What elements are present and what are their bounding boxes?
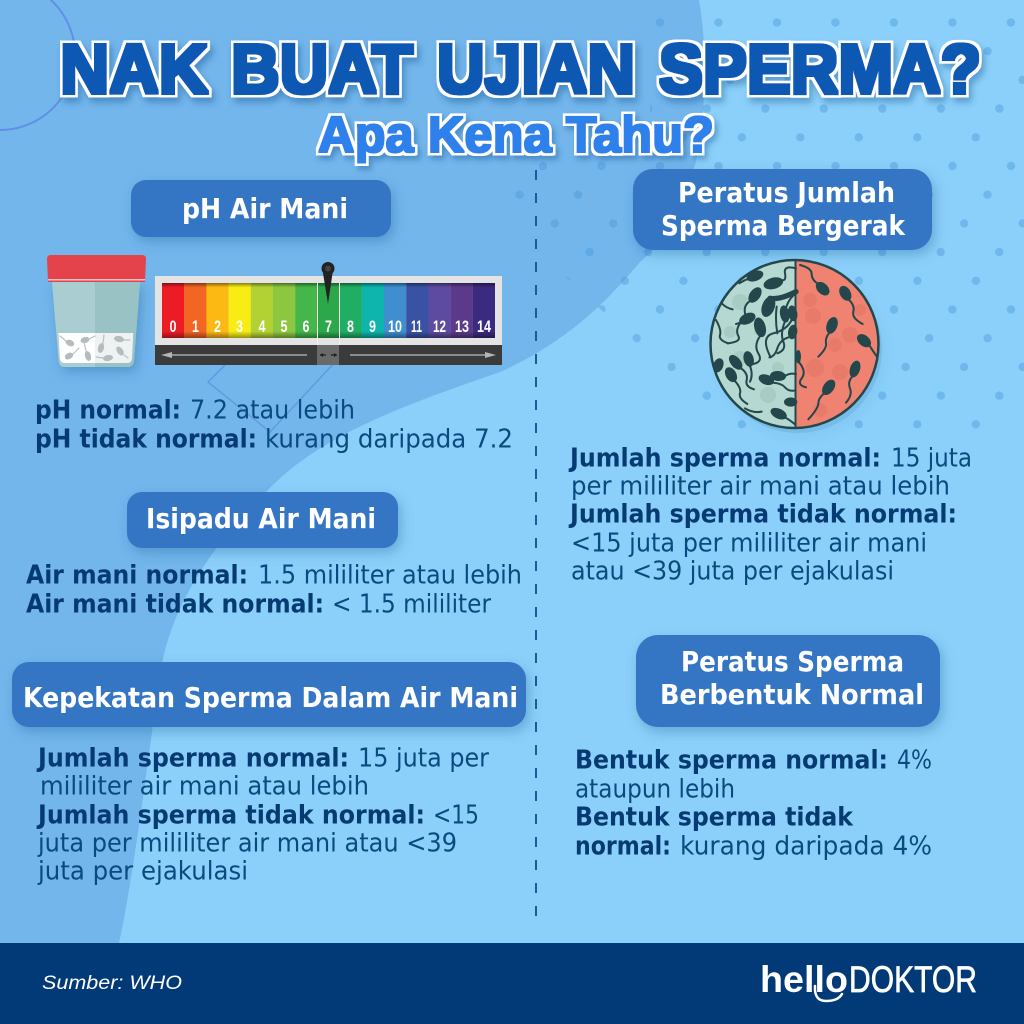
panel: isipadu air mani bbox=[26, 492, 522, 620]
text: volume values bbox=[26, 560, 522, 620]
panel: peratus jumlah sperma bergerak bbox=[568, 169, 972, 586]
panel: kepekatan sperma bbox=[12, 662, 526, 886]
text: morphology values: ataupun lebih bbox=[575, 774, 735, 804]
title: BUAT bbox=[231, 30, 413, 108]
chart: pH scale 0 to 14: 8 bbox=[347, 317, 354, 336]
panel: pH air mani bbox=[35, 180, 513, 454]
text: concentration values: juta per mililiter air mani atau <39 bbox=[37, 828, 457, 858]
heading: Peratus Sperma Berbentuk Normal: Berbentuk Normal bbox=[660, 678, 924, 711]
chart: pH scale 0 to 14: 0 bbox=[170, 317, 176, 336]
text: motility values: per mililiter air mani atau lebih bbox=[571, 472, 950, 502]
text: motility values bbox=[568, 444, 972, 586]
footer bar bbox=[0, 943, 1024, 1024]
text: pH values: 7.2 atau lebih bbox=[190, 396, 355, 426]
chart: pH scale 0 to 14: 14 bbox=[477, 317, 491, 336]
text: morphology values: Bentuk sperma tidak bbox=[575, 802, 854, 832]
chart: pH scale 0 to 14: 6 bbox=[302, 317, 310, 336]
text: concentration values: Jumlah sperma normal: bbox=[36, 744, 349, 774]
heading: Kepekatan Sperma Dalam Air Mani: Kepekatan Sperma Dalam Air Mani bbox=[23, 681, 518, 714]
heading: Peratus Jumlah Sperma Bergerak: Peratus Jumlah bbox=[678, 176, 895, 209]
chart: pH scale 0 to 14: 7 bbox=[325, 317, 332, 336]
chart: pH scale 0 to 14: 5 bbox=[280, 317, 288, 336]
text: concentration values: juta per ejakulasi bbox=[37, 856, 248, 886]
title: NAK bbox=[60, 30, 208, 108]
text: motility values: Jumlah sperma tidak normal: bbox=[568, 500, 957, 530]
chart: pH scale 0 to 14: 13 bbox=[455, 317, 469, 336]
decorative circle outline bbox=[0, 0, 75, 130]
chart: pH scale 0 to 14: 10 bbox=[388, 317, 402, 336]
text: motility values: atau <39 juta per ejakulasi bbox=[571, 556, 894, 586]
dot pattern bbox=[500, 10, 1024, 445]
text: pH values bbox=[35, 396, 513, 454]
heading: Isipadu Air Mani bbox=[127, 492, 398, 548]
text: volume values: Air mani normal: bbox=[26, 560, 248, 590]
chart: pH scale 0 to 14: 3 bbox=[236, 317, 243, 336]
text: morphology values bbox=[575, 746, 932, 862]
chart: pH scale 0 to 14: 11 bbox=[411, 317, 422, 336]
centre dashed divider bbox=[535, 170, 537, 922]
text: concentration values: Jumlah sperma tidak normal: bbox=[36, 800, 425, 830]
decorative diamond outline bbox=[208, 350, 335, 432]
chart: pH scale 0 to 14: 1 bbox=[192, 317, 199, 336]
text: concentration values: mililiter air mani atau lebih bbox=[40, 772, 369, 802]
text: concentration values: 15 juta per bbox=[358, 744, 489, 774]
heading: pH Air Mani: pH Air Mani bbox=[182, 192, 348, 225]
left half sperm bbox=[746, 270, 764, 282]
heading: Peratus Jumlah Sperma Bergerak: Sperma Bergerak bbox=[661, 209, 906, 242]
text: pH values: pH tidak normal: bbox=[35, 424, 257, 454]
text: motility values: 15 juta bbox=[891, 444, 972, 474]
text: volume values: 1.5 mililiter atau lebih bbox=[258, 560, 522, 590]
text: morphology values: normal: bbox=[575, 832, 671, 862]
text: volume values: Air mani tidak normal: bbox=[26, 590, 324, 620]
text: volume values: < 1.5 mililiter bbox=[332, 590, 491, 620]
panel: peratus sperma berbentuk normal bbox=[575, 635, 940, 862]
heading: Kepekatan Sperma Dalam Air Mani bbox=[12, 662, 526, 727]
text: pH values: pH normal: bbox=[35, 396, 181, 426]
title: UJIAN bbox=[437, 30, 635, 108]
text: concentration values: <15 bbox=[433, 800, 479, 830]
title bbox=[60, 30, 981, 108]
icon: sperma under microscope bbox=[710, 260, 882, 433]
text: morphology values: Bentuk sperma normal: bbox=[575, 746, 888, 776]
logo: hello doktor bbox=[760, 959, 977, 1001]
subtitle: Apa Kena Tahu? bbox=[318, 106, 714, 163]
logo: hello doktor: hello bbox=[760, 959, 848, 1000]
background darker blue shape bbox=[0, 0, 705, 943]
text: motility values: Jumlah sperma normal: bbox=[568, 444, 881, 474]
chart: pH scale 0 to 14: 2 bbox=[214, 317, 221, 336]
title: SPERMA? bbox=[659, 30, 981, 108]
text: morphology values: kurang daripada 4% bbox=[680, 832, 932, 862]
text: morphology values: 4% bbox=[897, 746, 932, 776]
heading: Peratus Sperma Berbentuk Normal bbox=[636, 635, 940, 727]
text: motility values: <15 juta per mililiter air mani bbox=[571, 528, 927, 558]
heading: pH Air Mani bbox=[131, 180, 391, 237]
heading: Isipadu Air Mani: Isipadu Air Mani bbox=[146, 502, 376, 535]
chart: pH scale 0 to 14 bbox=[155, 262, 502, 365]
source note: Sumber: WHO bbox=[42, 973, 182, 994]
text: concentration values bbox=[36, 744, 489, 886]
text: pH values: kurang daripada 7.2 bbox=[265, 424, 513, 454]
chart: pH scale 0 to 14: 12 bbox=[433, 317, 446, 336]
chart: pH scale 0 to 14: 9 bbox=[369, 317, 376, 336]
icon: sample jar bbox=[47, 255, 146, 367]
heading: Peratus Jumlah Sperma Bergerak bbox=[633, 169, 932, 250]
logo: hello doktor: DOKTOR bbox=[849, 959, 977, 1000]
right half sperm bbox=[816, 282, 830, 296]
heading: Peratus Sperma Berbentuk Normal: Peratus Sperma bbox=[681, 645, 904, 678]
chart: pH scale 0 to 14: 4 bbox=[258, 317, 266, 336]
